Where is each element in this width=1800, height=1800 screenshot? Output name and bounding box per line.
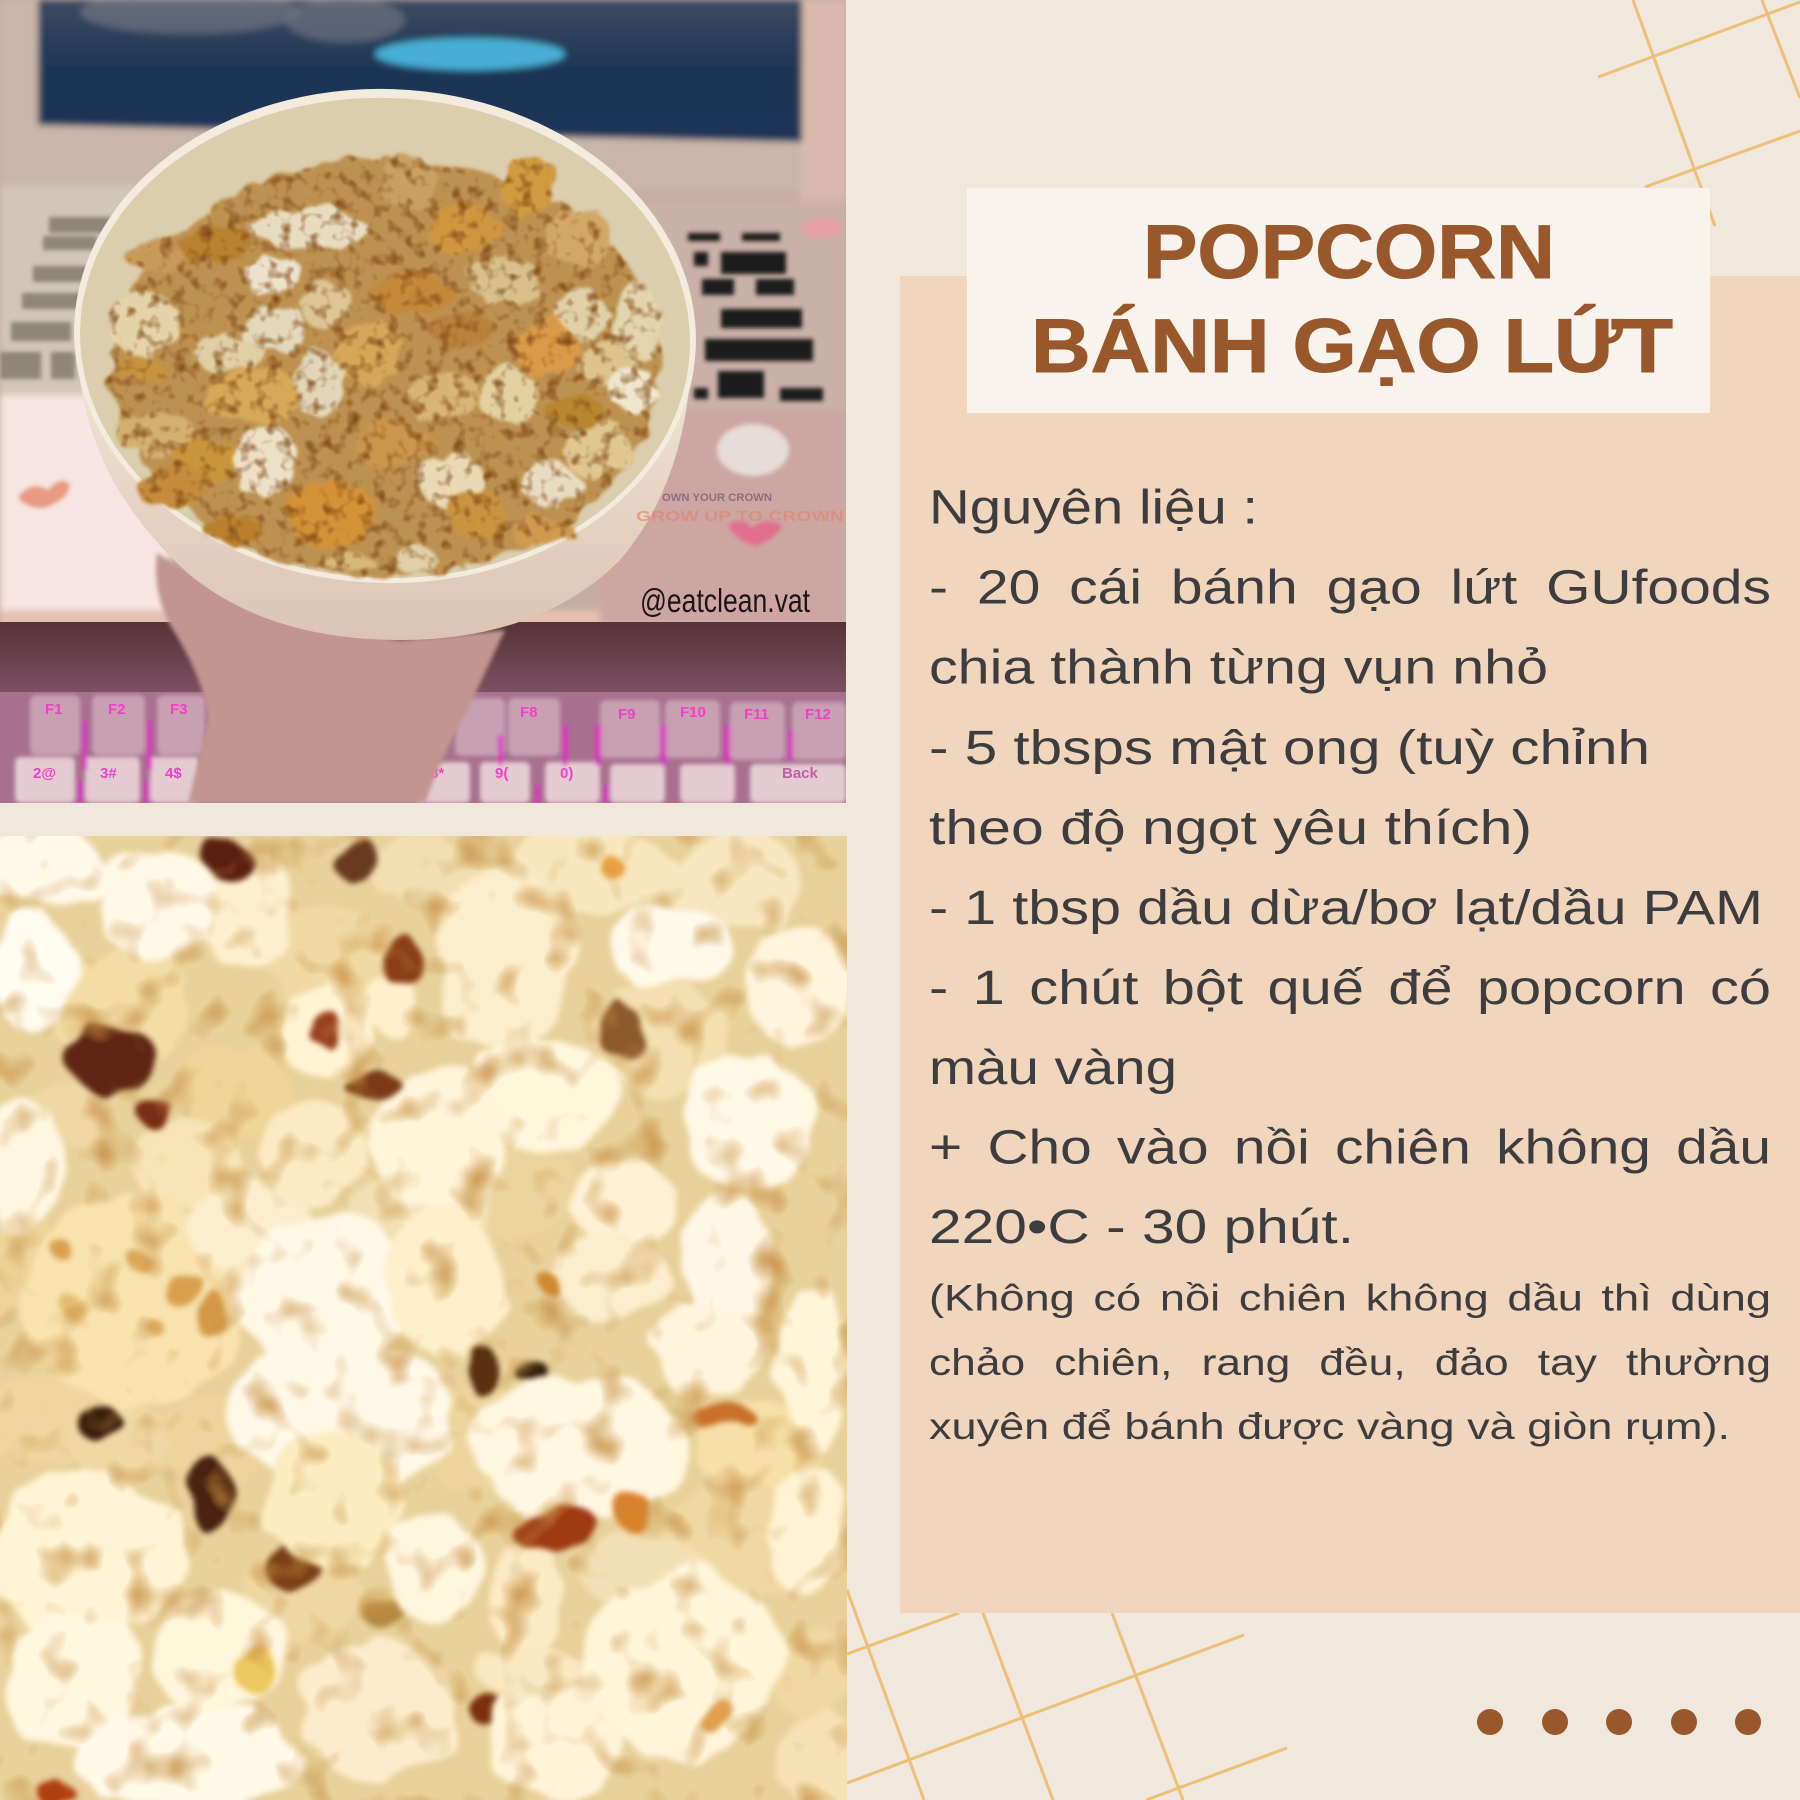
keyboard labels: F11 — [744, 706, 769, 723]
recipe text: - 1 chút bột quế để popcorn có — [929, 962, 1771, 1015]
keyboard labels: 0) — [560, 765, 573, 782]
keyboard labels: F9 — [618, 706, 636, 723]
icon: top right heart — [802, 218, 842, 238]
keyboard labels: F3 — [170, 701, 188, 718]
keyboard labels: 3# — [100, 765, 117, 782]
keyboard labels: F8 — [520, 704, 538, 721]
watermark: @eatclean.vat — [640, 582, 810, 619]
keyboard labels: Back — [782, 765, 819, 782]
title: BÁNH GẠO LỨT — [1031, 304, 1673, 389]
keyboard labels: F1 — [45, 701, 63, 718]
left laptop keys — [0, 217, 114, 379]
sticker slogan — [636, 492, 844, 525]
pagination dots — [1477, 1709, 1761, 1735]
icon: right heart — [728, 521, 782, 546]
hand — [156, 553, 505, 803]
keyboard labels: 4$ — [165, 765, 182, 782]
icon: sticker — [717, 424, 789, 476]
right laptop keys — [688, 233, 823, 401]
bowl rim — [66, 78, 704, 594]
keyboard labels: F2 — [108, 701, 126, 718]
keyboard labels: F10 — [680, 704, 706, 721]
keyboard keys — [15, 695, 846, 803]
keyboard labels: 2@ — [33, 765, 56, 782]
recipe text: - 5 tbsps mật ong (tuỳ chỉnh — [929, 722, 1650, 775]
recipe text: 220•C - 30 phút. — [929, 1201, 1354, 1254]
recipe text: Nguyên liệu : — [929, 482, 1258, 534]
recipe text: màu vàng — [929, 1042, 1177, 1095]
bowl outer — [80, 380, 690, 640]
recipe text — [929, 482, 1771, 1447]
recipe text: - 1 tbsp dầu dừa/bơ lạt/dầu PAM — [929, 882, 1763, 935]
keyboard labels — [33, 701, 831, 782]
photo: bowl of rice cake popcorn — [0, 0, 846, 803]
recipe text: chảo chiên, rang đều, đảo tay thường — [929, 1342, 1771, 1383]
recipe text: (Không có nồi chiên không dầu thì dùng — [929, 1278, 1771, 1319]
keyboard labels: 8* — [430, 765, 444, 782]
keyboard labels: 9( — [495, 765, 508, 782]
title — [1031, 210, 1673, 389]
bowl food — [109, 155, 662, 575]
sticker slogan: GROW UP TO CROWN — [636, 508, 844, 525]
keyboard labels: F12 — [805, 706, 831, 723]
bowl interior — [72, 88, 698, 588]
recipe text: xuyên để bánh được vàng và giòn rụm). — [929, 1406, 1730, 1447]
recipe text: + Cho vào nồi chiên không dầu — [929, 1122, 1771, 1174]
title: POPCORN — [1143, 210, 1555, 295]
sticker slogan: OWN YOUR CROWN — [662, 492, 772, 504]
recipe text: theo độ ngọt yêu thích) — [929, 802, 1532, 855]
photo: popcorn close-up — [0, 800, 890, 1800]
title box — [967, 188, 1710, 413]
panel: recipe background — [900, 276, 1800, 1613]
icon: left heart — [18, 481, 70, 508]
recipe text: chia thành từng vụn nhỏ — [929, 642, 1548, 695]
recipe text: - 20 cái bánh gạo lứt GUfoods — [929, 562, 1771, 615]
